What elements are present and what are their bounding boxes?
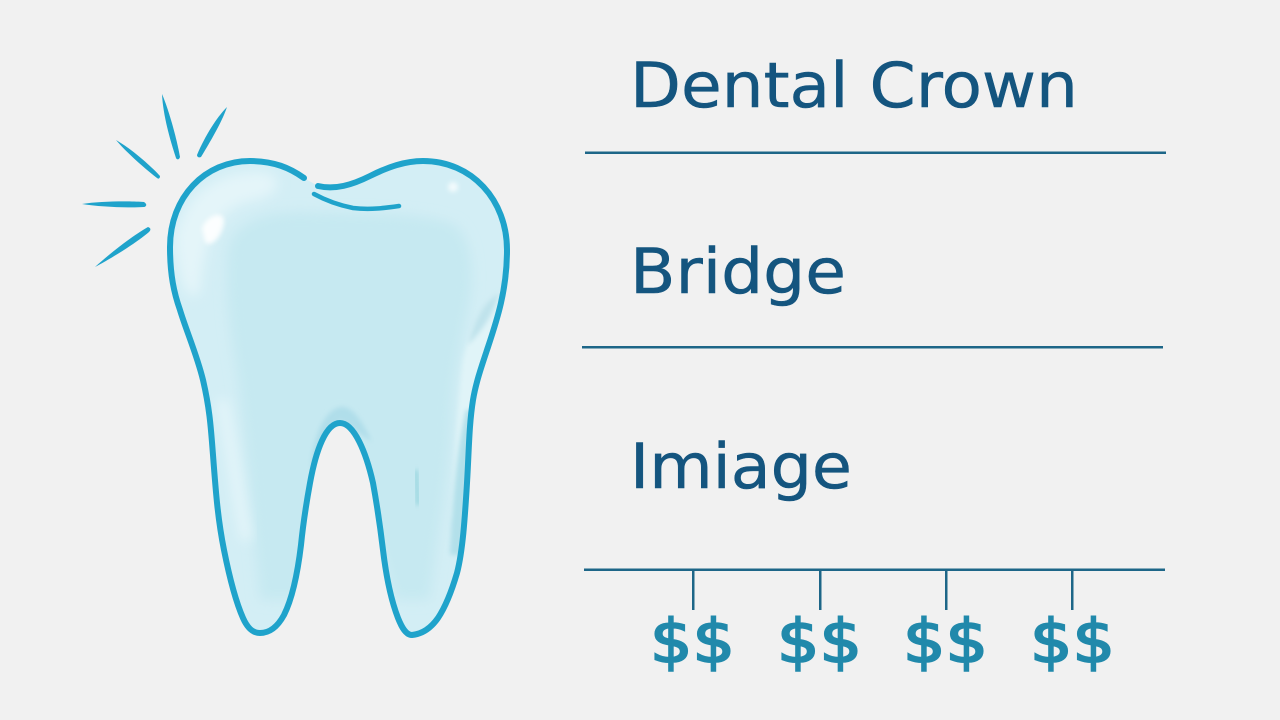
heading: Bridge: Bridge (630, 235, 846, 308)
tooth outline (170, 161, 507, 635)
price labels: $$ (777, 607, 862, 677)
price labels: $$ (650, 607, 735, 677)
divider line 2 (582, 346, 1163, 348)
price labels: $$ (903, 607, 988, 677)
tooth body fill (173, 164, 504, 632)
heading: Imiage: Imiage (630, 430, 852, 503)
price scale axis (584, 568, 1165, 610)
price labels: $$ (1030, 607, 1115, 677)
icon: tooth illustration (82, 94, 520, 640)
divider line 1 (585, 152, 1166, 154)
infographic canvas (82, 59, 1166, 672)
icon: pain spark lines (82, 94, 227, 267)
price labels (650, 607, 1115, 677)
heading: Dental Crown: Dental Crown (630, 49, 1078, 122)
